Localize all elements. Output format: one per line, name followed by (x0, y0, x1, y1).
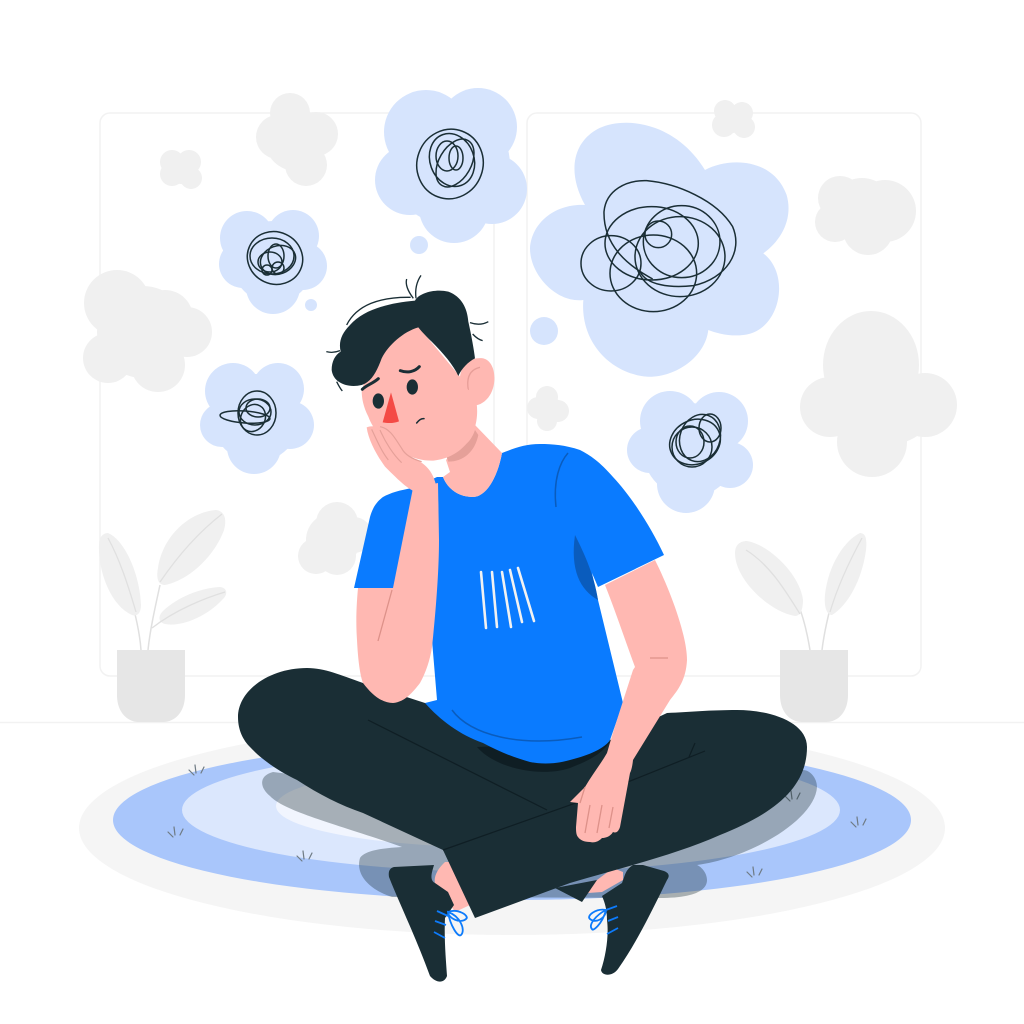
mouth (417, 419, 424, 423)
eyes (373, 393, 384, 409)
scribble: upper left (239, 223, 311, 293)
thought cloud: top centre (375, 88, 527, 243)
hand on cheek (367, 426, 438, 510)
shoelaces: right (589, 906, 618, 934)
thought cloud: left (200, 363, 314, 474)
rug (79, 721, 945, 935)
neck (443, 425, 502, 497)
trousers (238, 668, 807, 918)
plant: right (735, 533, 866, 722)
shirt sleeve shadow (574, 535, 598, 600)
grass tufts (168, 765, 866, 877)
neck shadow (445, 430, 478, 462)
scribble: large right (581, 181, 736, 312)
right arm and hand (570, 560, 687, 842)
thought cloud: lower right (627, 391, 753, 513)
left arm (356, 483, 439, 703)
scribble: left (220, 391, 276, 436)
arm crease (378, 590, 392, 641)
plant: left (99, 510, 226, 722)
trouser creases (368, 720, 705, 850)
shirt seams (452, 453, 582, 741)
skin ankles (435, 862, 623, 912)
head (zoom coordinates) (326, 275, 494, 510)
shoe: right (601, 865, 669, 975)
shadow beneath shirt (477, 742, 610, 772)
man (238, 275, 807, 982)
thought cloud: upper left (219, 210, 327, 314)
thought cloud: large right (530, 123, 789, 377)
stray hairs (326, 275, 488, 391)
face (362, 327, 477, 461)
panel: background windows (0, 113, 1024, 722)
right hand detail (580, 658, 668, 833)
grey background clouds (83, 93, 957, 575)
shirt stripes (481, 568, 534, 628)
shoelaces: left (434, 911, 467, 938)
thought bubble dots (305, 236, 558, 345)
eyebrows (362, 379, 378, 389)
ear (460, 358, 494, 405)
shoe: left (389, 865, 454, 982)
scribble: top centre (407, 120, 493, 208)
nose (383, 392, 399, 423)
man's shadow (262, 770, 817, 898)
hair (332, 291, 475, 386)
back shin (555, 880, 597, 902)
scribble: lower right (662, 409, 728, 473)
shirt (354, 444, 664, 763)
